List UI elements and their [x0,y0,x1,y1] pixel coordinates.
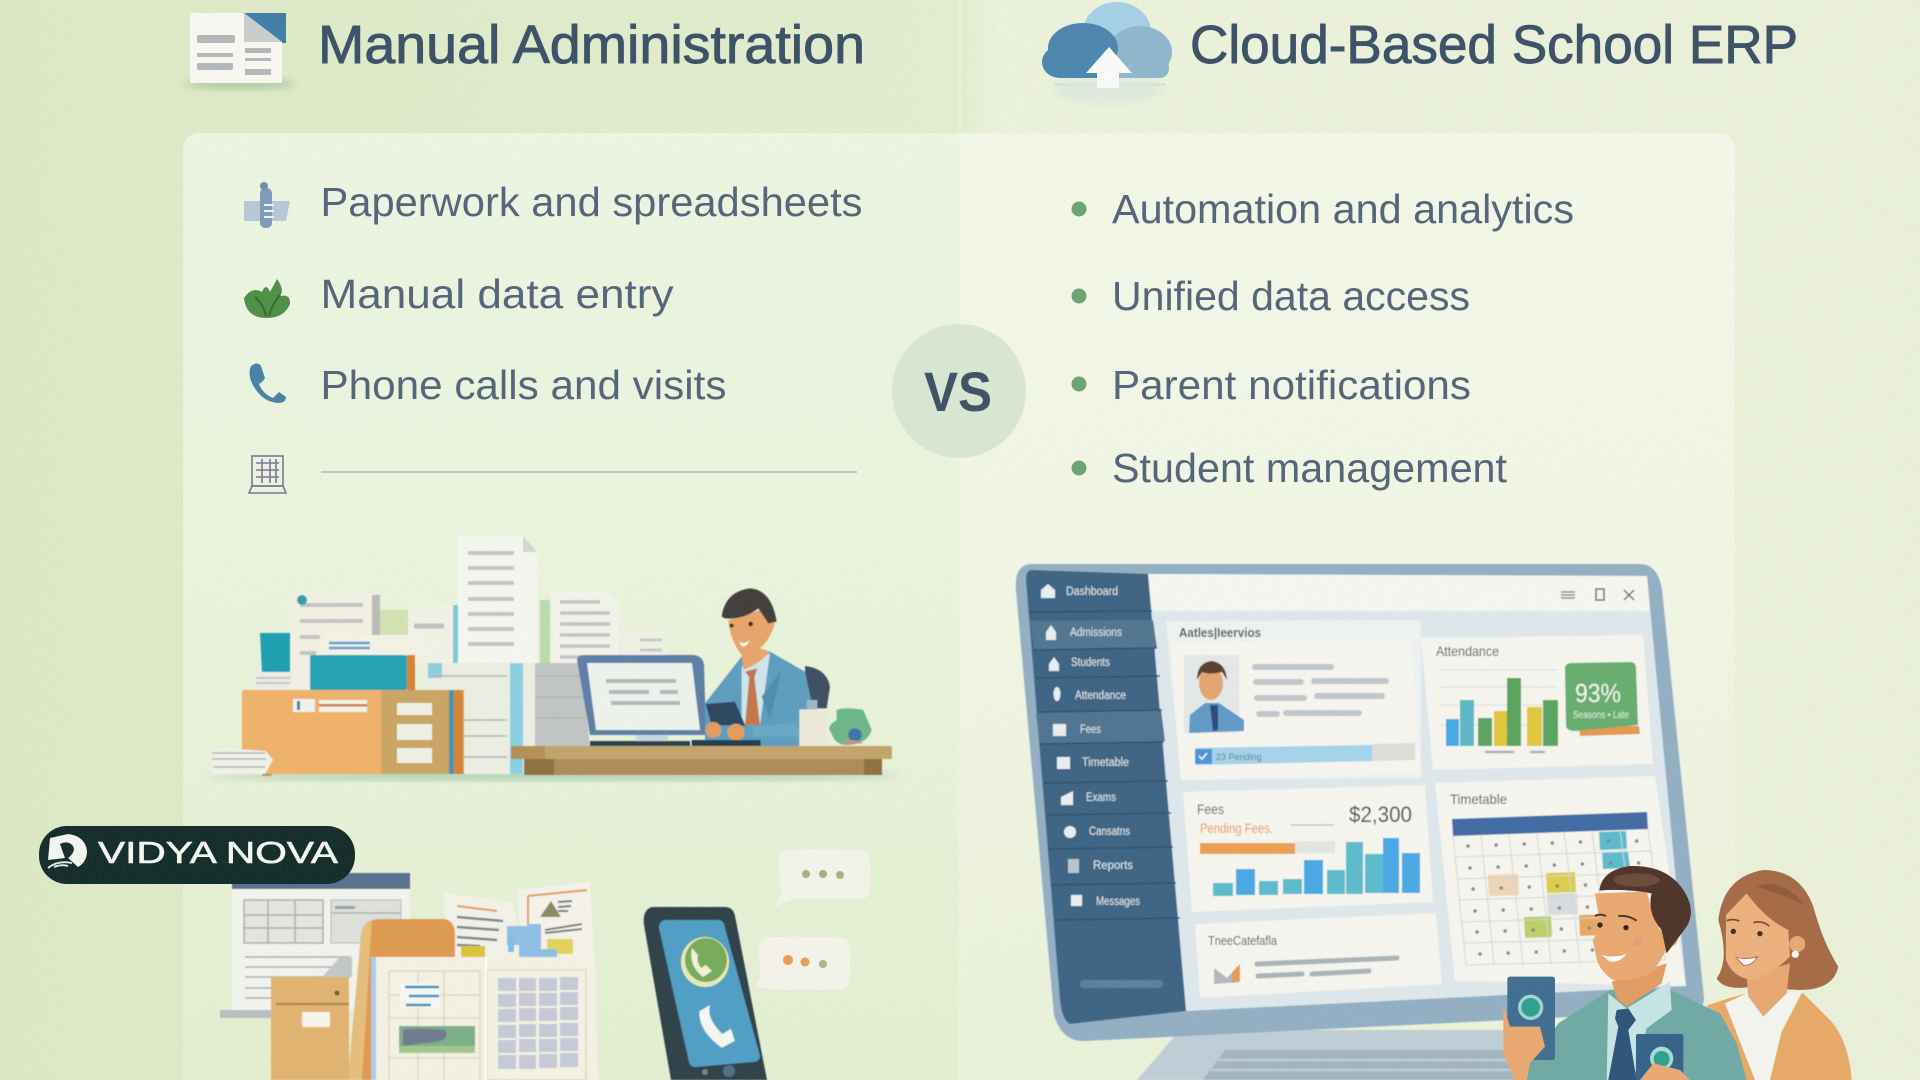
sidebar navigation: Students [1071,657,1110,669]
fees card: Pending Fees. [1200,821,1273,836]
icon: thumb clipboard [244,182,290,228]
list item: manual data entry: Manual data entry [320,271,674,317]
list item: student management: Student management [1112,445,1508,491]
profile card: 23 Pending [1216,752,1262,762]
list item: phone calls: Phone calls and visits [320,362,726,408]
notifications card: TneeCatefafla [1208,934,1277,948]
brand name: VIDYA NOVA [98,835,338,870]
screen [1148,574,1686,1011]
sidebar navigation: Dashboard [1066,586,1118,598]
laptop base [1137,1030,1570,1080]
notifications card [1195,913,1442,998]
loose reports [443,882,594,967]
fees card: Fees [1197,801,1224,817]
heading: cloud-based school ERP: Cloud-Based School ERP [1190,15,1798,75]
icon: swan logo [48,834,87,868]
heading: manual administration: Manual Administration [318,15,865,75]
sidebar navigation [1026,570,1186,1024]
sidebar navigation: Attendance [1075,690,1126,702]
brand badge: Vidya Nova [39,826,355,884]
tall paper stacks [291,536,666,689]
sidebar navigation: Cansatns [1089,826,1130,838]
sidebar navigation: Timetable [1082,757,1129,769]
icon: green leaves [244,279,290,318]
vs badge [892,324,1026,458]
panel: cloud-based school ERP [960,133,1735,1080]
spreadsheet window [220,873,410,1018]
icon: phone handset [250,364,286,403]
cardboard archive box [271,977,349,1080]
fees card [1183,785,1433,912]
vs badge: VS [924,360,992,423]
icon: paper document [185,13,295,89]
illustration: smartphone [644,907,767,1080]
window title bar [1148,574,1650,611]
illustration: smiling woman [1707,870,1852,1080]
profile card [1166,620,1421,780]
attendance card [1421,635,1653,770]
orange folder [348,919,455,1080]
list item: parent notifications: Parent notifications [1112,362,1471,408]
centre divider [958,0,962,1080]
icon: calculator grid [249,456,286,493]
icon: cloud upload [1042,2,1172,104]
timetable card [1435,776,1686,986]
chat bubble: bottom [755,937,850,990]
chat bubble: top [775,850,870,907]
man at desk [692,588,872,746]
attendance card: Attendance [1436,643,1499,659]
illustration: cloud ERP dashboard [1016,564,1704,1080]
list item: paperwork: Paperwork and spreadsheets [320,179,862,225]
blank list rule [321,471,857,473]
attendance card: 93% [1575,678,1621,708]
timetable card: Timetable [1450,791,1507,807]
list item: automation: Automation and analytics [1112,186,1574,232]
sidebar navigation: Fees [1080,724,1101,736]
sidebar navigation: Reports [1093,860,1133,872]
sidebar navigation: Messages [1096,896,1140,908]
list item: unified data: Unified data access [1112,273,1470,319]
illustration: forms and folders [220,873,598,1080]
list: ERP benefits [1072,186,1574,491]
pile of books [211,747,273,774]
wooden desk [511,746,892,775]
panel: manual administration [183,133,960,1080]
teal binders [253,633,421,690]
profile card: Aatles|Ieervios [1179,626,1261,640]
cardboard box [242,690,464,776]
open binder [371,957,598,1080]
fees card: $2,300 [1349,802,1412,827]
attendance card: Seasons • Late [1573,710,1629,721]
monitor frame [1016,564,1704,1041]
stacked binders [425,663,590,774]
computer monitor [577,655,706,746]
illustration: paperwork desk [210,536,900,780]
sidebar navigation: Admissions [1070,627,1122,639]
sidebar navigation: Exams [1086,792,1116,804]
illustration: smiling man with phones [1503,866,1747,1080]
